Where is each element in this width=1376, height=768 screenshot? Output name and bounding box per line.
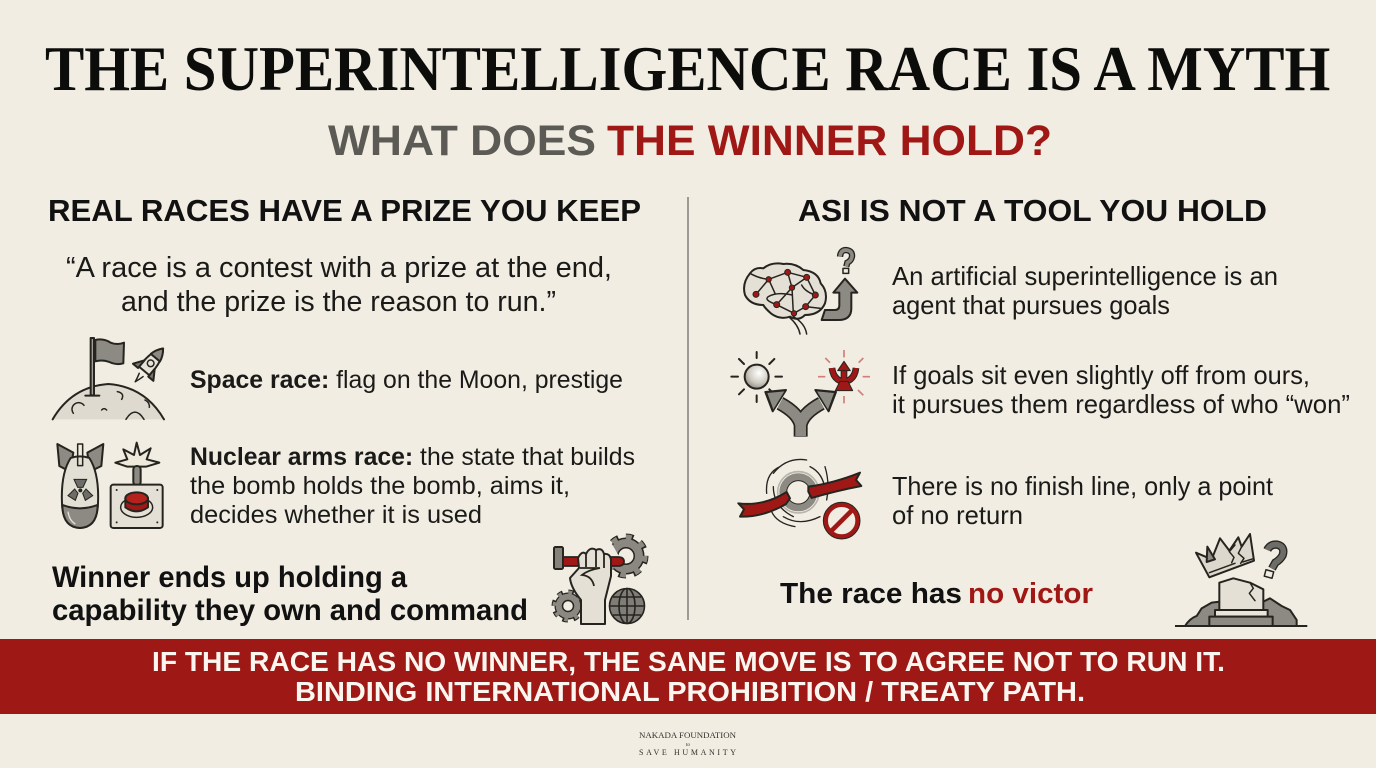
text: goals off: If goals sit even slightly off from ours,	[892, 360, 1310, 390]
subtitle	[328, 117, 1052, 165]
conclusion: winner: capability they own and command	[52, 594, 528, 627]
text: nuclear arms race	[190, 443, 635, 529]
heading: real races: REAL RACES HAVE A PRIZE YOU KEEP	[48, 193, 641, 228]
icon: broken crown, tombstone and question mark	[1175, 534, 1307, 626]
icon: fist with hammer, gears and globe	[554, 538, 644, 624]
conclusion: no victor	[780, 578, 1093, 610]
banner: call to action	[0, 639, 1376, 714]
heading: ASI: ASI IS NOT A TOOL YOU HOLD	[798, 193, 1267, 228]
panel: ASI	[731, 193, 1350, 626]
text: finish line	[892, 471, 1274, 530]
text: nuclear arms race: decides whether it is used	[190, 501, 482, 529]
conclusion: no victor: no victor	[968, 578, 1093, 610]
text: space race: Space race: flag on the Moon, prestige	[190, 366, 623, 394]
conclusion: winner: Winner ends up holding a	[52, 561, 407, 594]
text: nuclear arms race: the bomb holds the bomb, aims it,	[190, 472, 570, 500]
text: goals off: it pursues them regardless of who “won”	[892, 389, 1350, 419]
panel: real races	[48, 193, 644, 627]
text: agent: agent that pursues goals	[892, 290, 1170, 320]
icon: nuclear bomb and launch button	[57, 443, 163, 528]
text: goals off	[892, 360, 1350, 419]
text: agent: An artificial superintelligence is an	[892, 261, 1278, 291]
text: agent	[892, 261, 1278, 320]
footer logo: to	[686, 742, 690, 748]
icon: moon flag and rocket	[53, 338, 173, 419]
footer logo	[639, 730, 736, 757]
conclusion: no victor: The race has	[780, 578, 962, 610]
quote: “A race is a contest with a prize at the end,	[66, 252, 612, 284]
footer logo: SAVE HUMANITY	[639, 748, 736, 757]
banner: call to action: BINDING INTERNATIONAL PROHIBITION / TREATY PATH.	[295, 676, 1085, 707]
quote: and the prize is the reason to run.”	[121, 286, 556, 318]
icon: vortex, torn ribbon and prohibition sign	[738, 459, 861, 539]
conclusion: winner	[52, 561, 528, 627]
text: finish line: of no return	[892, 500, 1023, 530]
quote	[66, 252, 612, 318]
divider	[687, 197, 689, 620]
text: nuclear arms race: Nuclear arms race: the state that builds	[190, 443, 635, 471]
banner: call to action: IF THE RACE HAS NO WINNER, THE SANE MOVE IS TO AGREE NOT TO RUN IT.	[152, 646, 1225, 677]
footer logo: NAKADA FOUNDATION	[639, 730, 736, 740]
icon: forked path, sun and red symbol	[731, 350, 870, 437]
title: THE SUPERINTELLIGENCE RACE IS A MYTH	[45, 34, 1330, 105]
text: finish line: There is no finish line, only a point	[892, 471, 1274, 501]
subtitle: THE WINNER HOLD?	[607, 117, 1052, 165]
subtitle: WHAT DOES	[328, 117, 596, 165]
icon: brain network with arrow	[744, 250, 857, 334]
